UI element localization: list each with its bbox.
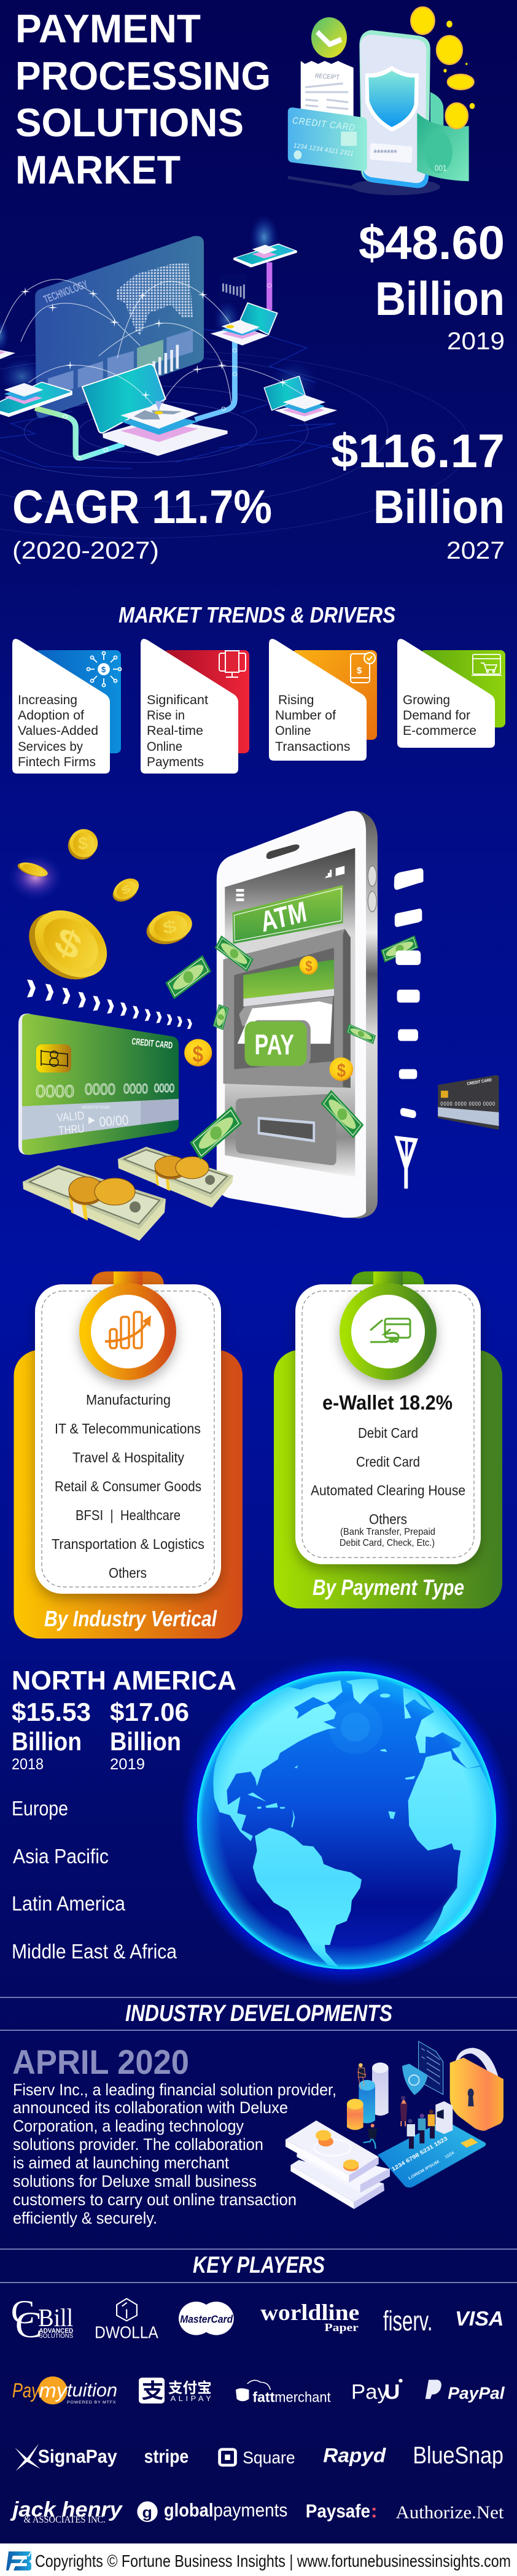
logo: Rapyd: Rapyd xyxy=(323,2445,386,2467)
CAGR xyxy=(12,481,272,564)
regional stats: north america: $15.53 xyxy=(12,1697,91,1726)
regional stats: north america xyxy=(12,1666,236,1773)
heading: industry developments xyxy=(0,1998,517,2030)
logo: CCBill: ADVANCED xyxy=(39,2328,73,2335)
logo: Alipay: 支付宝 xyxy=(168,2376,212,2397)
illustration: isometric security and payments: 1234 6798 5231 1523 xyxy=(391,2135,448,2172)
green credit card: 00/00 xyxy=(99,1112,129,1130)
panel: by industry vertical: BFSI | Healthcare xyxy=(76,1507,181,1523)
development date: APRIL 2020 xyxy=(12,2043,189,2081)
arrow chevrons xyxy=(27,979,192,1029)
logo: Authorize.Net: Authorize.Net xyxy=(395,2502,504,2523)
icon: rising bar chart xyxy=(105,1312,150,1348)
illustration: mobile phone showing an ATM xyxy=(217,810,378,1219)
logo: Dwolla: DWOLLA xyxy=(95,2324,158,2342)
gold coins: $ xyxy=(193,1042,203,1067)
logo: Worldline Paper: Paper xyxy=(324,2322,359,2334)
logo: Dwolla xyxy=(95,2299,158,2342)
heading: key players xyxy=(0,2249,517,2283)
logo: CCBill: SOLUTIONS xyxy=(39,2333,73,2340)
market size 2027: Billion xyxy=(373,481,505,533)
green credit card: THRU xyxy=(58,1122,85,1138)
panel: real-time online payments: Online xyxy=(147,740,182,754)
title: MARKET xyxy=(15,147,181,192)
gold coins: $ xyxy=(305,958,313,974)
logo: Visa: VISA xyxy=(455,2307,504,2330)
heading: market trends and drivers: MARKET TRENDS & DRIVERS xyxy=(119,602,395,627)
panel: online transactions: Online xyxy=(275,724,311,738)
market size 2019: 2019 xyxy=(447,328,505,355)
panel: e-commerce demand: Demand for xyxy=(403,708,470,723)
panel: by industry vertical: Manufacturing xyxy=(86,1392,171,1408)
development text: efficiently & securely. xyxy=(13,2209,157,2227)
logo: Global Payments: g xyxy=(142,2505,152,2521)
panel: real-time online payments: Rise in xyxy=(147,708,185,723)
region list: Europe xyxy=(12,1797,68,1820)
regional stats: north america: Billion xyxy=(12,1727,82,1756)
logo: SignaPay: SignaPay xyxy=(38,2446,117,2467)
logo: Global Payments xyxy=(137,2499,287,2522)
logo: MasterCard: MasterCard xyxy=(180,2313,233,2325)
green credit card: CREDIT CARD xyxy=(131,1036,173,1051)
panel: by payment type: Credit Card xyxy=(356,1454,420,1470)
logo: Stripe: stripe xyxy=(144,2446,189,2467)
panel: online transactions: Transactions xyxy=(275,740,350,754)
footer xyxy=(0,2543,517,2576)
illustration: mobile phone showing an ATM: PAY xyxy=(255,1029,294,1060)
logo: Global Payments: payments xyxy=(213,2499,287,2521)
gold coins: $ xyxy=(120,882,132,898)
panel: by payment type: Debit Card, Check, Etc.) xyxy=(340,1538,435,1548)
illustration: phone with shield, credit card, receipt and coins: ******* xyxy=(373,148,397,159)
logo: MasterCard xyxy=(179,2302,234,2335)
title xyxy=(15,6,271,192)
illustration: phone with shield, credit card, receipt and coins: 001 xyxy=(435,164,446,173)
logo: CCBill: C xyxy=(11,2294,34,2330)
logo: Square xyxy=(220,2449,295,2467)
regional stats: north america: NORTH AMERICA xyxy=(12,1666,236,1696)
green credit card: 0000 xyxy=(36,1082,74,1101)
green credit card xyxy=(18,1014,179,1155)
logo: Paymytuition: my xyxy=(39,2379,68,2402)
panel: by industry vertical: By Industry Vertical xyxy=(44,1606,217,1631)
illustration: phone with shield, credit card, receipt and coins xyxy=(288,7,475,195)
small black credit card xyxy=(438,1075,499,1130)
gold coins: $ xyxy=(78,834,88,854)
flying banknotes xyxy=(165,936,418,1160)
logo: CCBill xyxy=(11,2294,73,2346)
illustration: phone with shield, credit card, receipt and coins: 1234 1234 4321 2311 xyxy=(293,142,354,158)
development text: Corporation, a leading technology xyxy=(13,2117,244,2135)
panel: by payment type: Debit Card xyxy=(358,1425,418,1441)
title: PAYMENT xyxy=(15,6,201,51)
illustration: isometric security and payments xyxy=(286,2041,503,2209)
CAGR: CAGR 11.7% xyxy=(12,481,272,533)
region list: Asia Pacific xyxy=(13,1845,109,1868)
panel: by payment type: By Payment Type xyxy=(313,1575,464,1600)
panel: real-time online payments xyxy=(141,639,249,774)
panel: by payment type: Others xyxy=(369,1511,407,1527)
panel: fintech value-added services: Services by xyxy=(18,740,83,754)
panel: by payment type: (Bank Transfer, Prepaid xyxy=(340,1527,435,1537)
small black credit card: 0000 0000 0000 0000 xyxy=(440,1101,495,1107)
panel: e-commerce demand xyxy=(397,639,505,748)
panel: by industry vertical: IT & Telecommunications xyxy=(55,1421,201,1437)
logo: Fattmerchant: merchant xyxy=(274,2389,331,2405)
CAGR: (2020-2027) xyxy=(12,537,159,564)
logo: Alipay: ALIPAY xyxy=(171,2394,211,2403)
logo: Fattmerchant xyxy=(236,2380,331,2405)
logo: Fattmerchant: fatt xyxy=(252,2389,274,2405)
panel: real-time online payments: Significant xyxy=(147,693,208,707)
panel: e-commerce demand: E-commerce xyxy=(403,724,476,738)
panel: by payment type xyxy=(274,1271,502,1608)
panel: online transactions: $ xyxy=(357,665,362,676)
market size 2019 xyxy=(359,217,505,355)
title: PROCESSING xyxy=(15,53,271,98)
logo: Square: Square xyxy=(243,2449,295,2467)
green credit card: 0000 xyxy=(154,1082,174,1095)
logo: PayPal xyxy=(426,2380,505,2403)
logo: SignaPay xyxy=(15,2443,117,2471)
signal dashes and antenna xyxy=(394,868,424,1189)
logo: Paymytuition: POWERED BY MTFX xyxy=(67,2400,117,2405)
cash stacks with coins xyxy=(23,1147,233,1241)
development text: announced its collaboration with Deluxe xyxy=(13,2098,288,2117)
regional stats: north america: $17.06 xyxy=(110,1697,189,1726)
panel: real-time online payments: Payments xyxy=(147,755,204,769)
panel: online transactions: Number of xyxy=(275,708,336,723)
gold coins: $ xyxy=(337,1060,346,1080)
panel: by industry vertical: Travel & Hospitality xyxy=(72,1449,184,1465)
logo: Fiserv: fiserv. xyxy=(383,2306,433,2337)
illustration: phone with shield, credit card, receipt and coins: RECEIPT xyxy=(315,72,340,81)
development text: solutions provider. The collaboration xyxy=(13,2135,263,2154)
panel: fintech value-added services: Increasing xyxy=(18,693,77,707)
panel: fintech value-added services: Adoption of xyxy=(18,708,84,723)
regional stats: north america: 2019 xyxy=(110,1756,145,1773)
market size 2019: $48.60 xyxy=(359,217,505,270)
panel: fintech value-added services: Values-Added xyxy=(18,724,98,738)
panel: by industry vertical: Retail & Consumer Goods xyxy=(55,1478,201,1494)
market size 2027: $116.17 xyxy=(331,425,505,478)
heading: industry developments: INDUSTRY DEVELOPMENTS xyxy=(125,2001,392,2027)
heading: key players: KEY PLAYERS xyxy=(193,2252,325,2278)
panel: by payment type: e-Wallet 18.2% xyxy=(322,1391,453,1414)
illustration: global payment network xyxy=(0,215,469,538)
panel: fintech value-added services: Fintech Firms xyxy=(18,755,96,769)
panel: online transactions xyxy=(269,639,377,761)
illustration: global payment network: TECHNOLOGY xyxy=(42,277,90,306)
gold coins: $ xyxy=(161,917,178,938)
region list: Middle East & Africa xyxy=(12,1940,177,1963)
logo: Paysafe: Paysafe xyxy=(306,2500,370,2521)
development text: customers to carry out online transaction xyxy=(13,2190,297,2209)
icon: hand holding card xyxy=(370,1319,410,1342)
market size 2027: 2027 xyxy=(446,537,505,564)
panel: fintech value-added services xyxy=(12,639,122,774)
logo: Paymytuition: tuition xyxy=(67,2380,117,2400)
green credit card: 0000 xyxy=(123,1081,148,1096)
panel: by industry vertical: Others xyxy=(109,1565,147,1581)
logo: Jack Henry: jack henry xyxy=(10,2497,123,2521)
panel: real-time online payments: Real-time xyxy=(147,724,203,738)
logo: CCBill: C xyxy=(15,2304,42,2346)
gold coins xyxy=(7,829,353,1081)
logo: PayU: U xyxy=(384,2380,400,2403)
logo: Alipay: 支 xyxy=(141,2375,164,2405)
panel: e-commerce demand: Growing xyxy=(403,693,450,707)
small black credit card: CREDIT CARD xyxy=(467,1078,492,1087)
market size 2027 xyxy=(331,425,505,564)
panel: fintech value-added services: $ xyxy=(101,665,106,674)
development text: Fiserv Inc., a leading financial solution provider, xyxy=(13,2081,336,2099)
region list xyxy=(12,1797,177,1963)
title: SOLUTIONS xyxy=(15,100,244,145)
icon: Fortune Business Insights logo xyxy=(6,2551,31,2570)
logo: Paymytuition: Pay xyxy=(12,2379,41,2402)
green credit card: 0000 xyxy=(85,1081,115,1098)
logo: PayPal: PayPal xyxy=(448,2384,505,2403)
panel: by industry vertical xyxy=(14,1271,243,1639)
illustration: mobile phone showing an ATM: ATM xyxy=(258,896,309,939)
illustration: phone with shield, credit card, receipt and coins: CREDIT CARD xyxy=(292,115,356,133)
green credit card: VALID xyxy=(56,1109,85,1125)
regional stats: north america: 2018 xyxy=(12,1756,44,1773)
illustration: isometric security and payments: LOREM IPSUM xyxy=(408,2160,440,2181)
logo: Global Payments: global xyxy=(164,2499,213,2521)
development text xyxy=(13,2081,336,2227)
region list: Latin America xyxy=(12,1892,126,1915)
illustration: globe xyxy=(180,1655,513,1986)
illustration: isometric security and payments: 11/24 xyxy=(444,2151,455,2160)
logo: Worldline Paper: worldline xyxy=(260,2300,359,2326)
logo: Alipay xyxy=(139,2375,212,2405)
market size 2019: Billion xyxy=(375,273,505,325)
logo: Jack Henry: & ASSOCIATES INC. xyxy=(24,2514,106,2525)
key player logos xyxy=(10,2294,505,2525)
logo: Paymytuition xyxy=(12,2376,117,2405)
regional stats: north america: Billion xyxy=(110,1727,181,1756)
logo: CCBill: Bill xyxy=(38,2303,73,2332)
gold coins: $ xyxy=(50,918,87,968)
development text: is aimed at launching merchant xyxy=(13,2154,229,2172)
panel: by industry vertical: Transportation & Logistics xyxy=(52,1536,204,1552)
logo: Paysafe: : xyxy=(371,2500,378,2521)
green credit card: MONTH/YEAR xyxy=(82,1104,111,1110)
panel: by payment type: Automated Clearing House xyxy=(311,1482,465,1498)
development text: solutions for Deluxe small business xyxy=(13,2172,257,2190)
panel: online transactions: Rising xyxy=(278,693,314,707)
logo: PayU: Pay xyxy=(351,2380,388,2403)
